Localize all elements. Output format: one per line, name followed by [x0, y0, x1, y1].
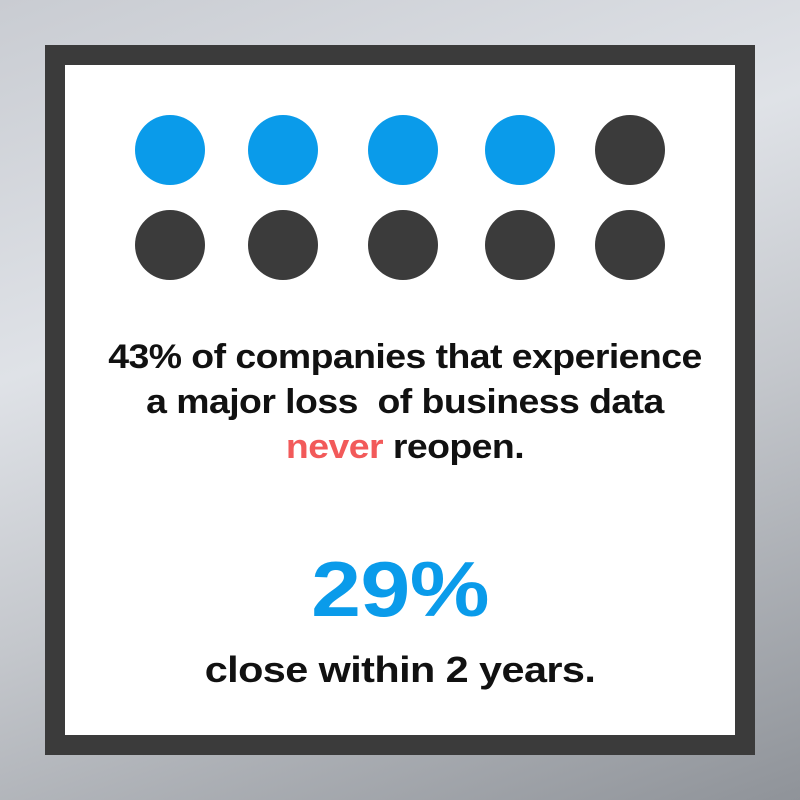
subtext: close within 2 years.: [205, 649, 595, 690]
headline text: never reopen.: [286, 428, 524, 466]
headline text: a major loss of business data: [146, 383, 664, 421]
panel: frame: [45, 45, 755, 755]
dot grid: [135, 115, 665, 280]
big stat 29%: 29%: [311, 545, 489, 633]
headline text: 43% of companies that experience: [108, 338, 702, 376]
headline text: [108, 338, 702, 466]
